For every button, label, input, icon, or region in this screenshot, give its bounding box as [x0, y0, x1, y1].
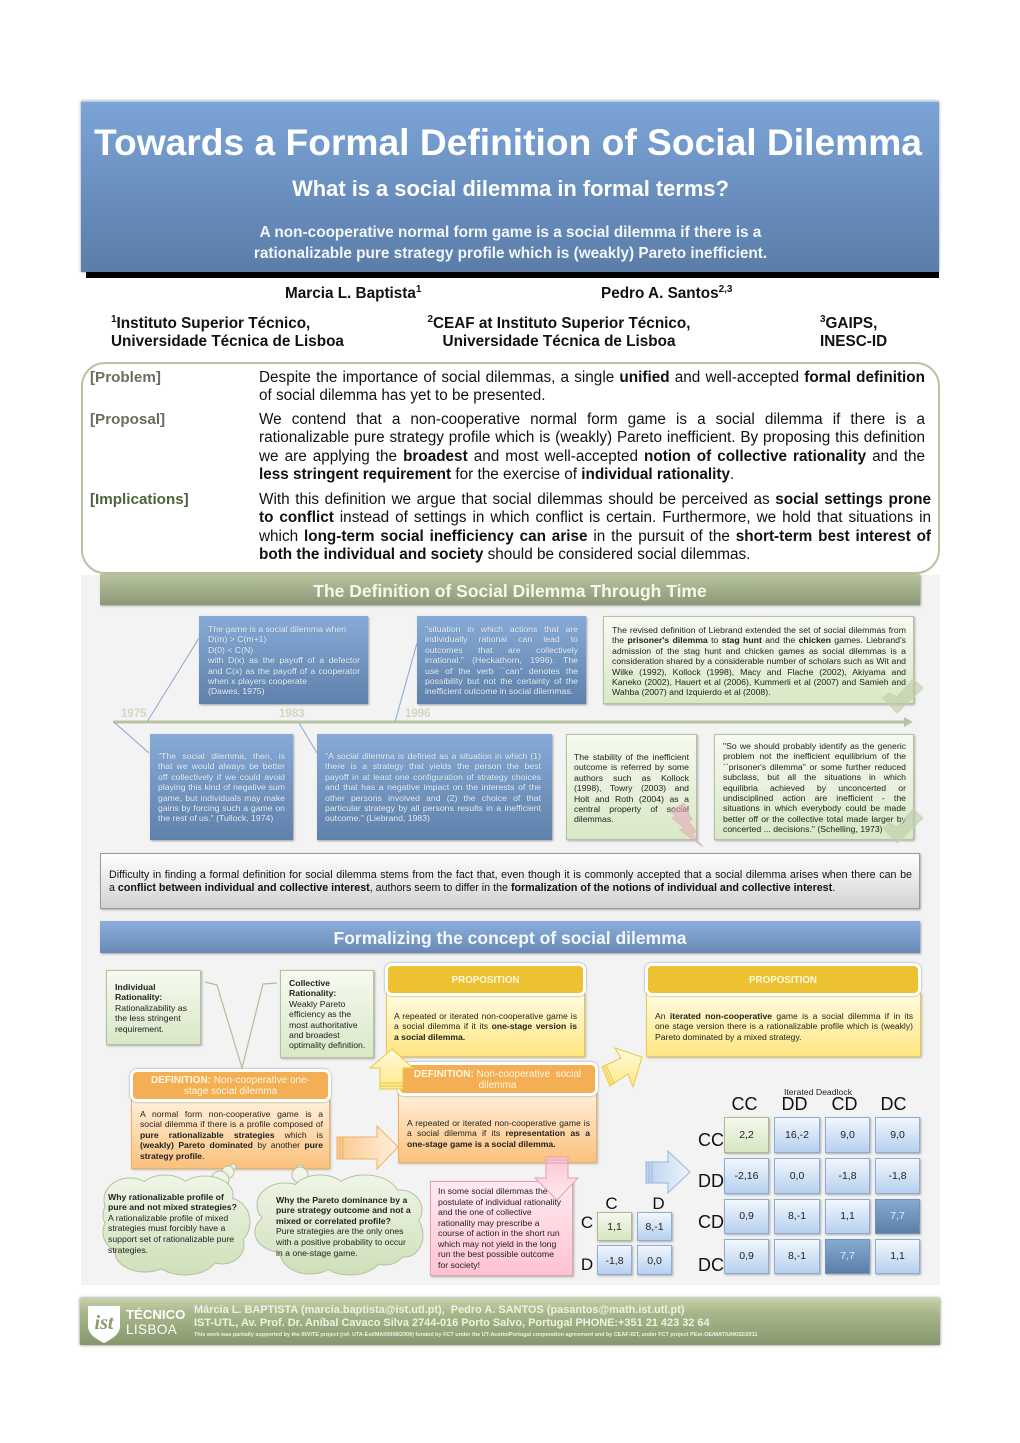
section heading: formalizing: Formalizing the concept of social dilemma	[334, 928, 686, 948]
thought cloud 1: pure and not mixed strategies?	[108, 1202, 237, 1212]
callout: pink note: course of action in the short run	[438, 1228, 560, 1238]
box: individual rationality: the less stringent	[115, 1013, 181, 1023]
box: Schelling 1973: problem not the inefficient equilibrium of the	[723, 751, 906, 761]
year 1983: 1983	[279, 708, 305, 720]
box: Schelling 1973	[714, 734, 914, 840]
cell 7,7 highlighted: 7,7	[840, 1250, 855, 1262]
definition header: DEFINITION: Non-cooperative social	[414, 1069, 581, 1080]
text: implications	[259, 491, 931, 563]
contact details	[194, 1304, 710, 1329]
label: problem: [Problem]	[90, 369, 161, 386]
box: Dawes 1975: when x players cooperate	[208, 676, 307, 686]
section heading: formalizing	[100, 921, 920, 953]
footer bar	[80, 1298, 940, 1345]
box: Schelling 1973: ``prisoner's dilemma" or some further reduced	[723, 762, 906, 772]
proposition header	[385, 963, 586, 996]
contact details: Márcia L. BAPTISTA (marcia.baptista@ist.utl.pt), Pedro A. SANTOS (pasantos@math.ist.utl.pt)	[194, 1304, 684, 1316]
box: Liebrand extensions: the prisoner's dilemma to stag hunt and the chicken games. Liebrand's	[612, 635, 906, 645]
callout: pink note: In some social dilemmas the	[438, 1186, 548, 1196]
cell 9,0	[825, 1117, 870, 1153]
definition body	[398, 1092, 597, 1163]
year 1975: 1975	[121, 708, 147, 720]
connector lines to definition	[205, 982, 277, 1068]
cell 8,-1: 8,-1	[788, 1250, 806, 1262]
cell C,D	[637, 1212, 672, 1241]
box: Liebrand 1983: and that has a negative impact on the interests of the	[325, 782, 541, 792]
box: Schelling 1973: situations in which everybody could be made	[723, 803, 906, 813]
callout: pink note: rationality may prescribe a	[438, 1218, 539, 1228]
text: proposal	[259, 411, 925, 483]
proposition: repeated game	[384, 962, 588, 1059]
text: proposal: we are applying the broadest and most well-accepted notion of collective rationality and the	[259, 448, 925, 465]
section heading: through time: The Definition of Social Dilemma Through Time	[313, 581, 707, 601]
box: collective rationality: and broadest	[289, 1030, 340, 1040]
banner gradient panel	[81, 101, 939, 272]
proposition body: a social dilemma.	[394, 1032, 465, 1042]
row label D: D	[581, 1255, 593, 1274]
text: problem	[259, 369, 925, 404]
cell -1,8	[825, 1158, 870, 1194]
cell 7,7 highlighted: 7,7	[890, 1210, 905, 1222]
proposition body: A repeated or iterated non-cooperative game is	[394, 1011, 577, 1021]
cell -1,8: -1,8	[888, 1170, 907, 1182]
icon: check mark 1	[883, 679, 923, 713]
definition body: (weakly) Pareto dominated by another pure	[140, 1140, 323, 1150]
box: Schelling 1973: equilibria achieved by unconcerted or	[723, 783, 906, 793]
box: Liebrand 1983: there is a strategy that yields the person the best	[325, 761, 541, 771]
thought cloud 1: strategies must forcibly have a	[108, 1223, 226, 1233]
proposition header	[645, 963, 921, 996]
cell 1,1: 1,1	[890, 1250, 905, 1262]
box: Liebrand 1983: particular strategy by all persons results in a inefficient	[325, 803, 541, 813]
proposition body: Pareto dominated by a mixed strategy.	[655, 1032, 802, 1042]
box: Tullock 1974: off collectively if we could avoid	[158, 772, 285, 782]
proposition body: An iterated non-cooperative game is a social dilemma if in its	[655, 1011, 913, 1021]
box: Dawes 1975: The game is a social dilemma when	[208, 624, 346, 634]
iterated deadlock matrix	[698, 1087, 922, 1276]
box: Heckathorn 1996: "situation in which actions that are	[425, 624, 578, 634]
box: Liebrand extensions: Wahba (2007) and Izquierdo et al (2008).	[612, 687, 771, 697]
cell 2,2	[724, 1117, 769, 1153]
row label DC: DC	[698, 1255, 724, 1275]
definition: non-cooperative	[396, 1060, 600, 1165]
thought cloud 1: A rationalizable profile of mixed	[108, 1213, 228, 1223]
proposition: iterated game	[644, 962, 923, 1059]
box: individual rationality: Individual	[115, 982, 156, 992]
matrix caption: Iterated Deadlock	[784, 1087, 852, 1097]
light gray poster background	[81, 575, 940, 1285]
cell C,C	[597, 1212, 632, 1241]
arrow: up to proposition	[370, 1049, 413, 1089]
cell 2,2: 2,2	[739, 1129, 754, 1141]
cell D,D: 0,0	[647, 1255, 662, 1267]
key statement: A non-cooperative normal form game is a social dilemma if there is a	[260, 224, 761, 241]
cell -1,8	[875, 1158, 920, 1194]
abstract panel	[81, 362, 940, 574]
cell 8,-1	[774, 1199, 820, 1234]
proposition body: one stage version there is a rationalizable profile which is (weakly)	[655, 1021, 913, 1031]
box: Dawes 1975: with D(x) as the payoff of a defector	[208, 655, 360, 665]
cell 0,9: 0,9	[739, 1210, 754, 1222]
column label DC: DC	[880, 1094, 906, 1114]
definition header: dilemma	[479, 1080, 516, 1091]
row label CD: CD	[698, 1212, 724, 1232]
box: Schelling 1973: undisciplined action are inefficient - the	[723, 793, 906, 803]
arrow: diagonal to iterated proposition	[602, 1048, 642, 1087]
box: Tullock 1974: "The social dilemma, then, is	[158, 751, 285, 761]
definition body: strategy profile.	[140, 1151, 204, 1161]
cell -2,16	[724, 1158, 769, 1194]
cell -1,8: -1,8	[838, 1170, 857, 1182]
key statement: rationalizable pure strategy profile which is (weakly) Pareto inefficient.	[254, 245, 767, 262]
funding note: This work was partially supported by the INVITE project (ref. UTA-Est/MAI/0008/2009) funded by FCT under the UT-Austin/Portugal cooperation agreement and by CEAF-IST, under FCT project PEst-OE/MAT/UI4032/2011	[194, 1332, 757, 1338]
box: Liebrand extensions: admission of the stag hunt and chicken games as social dilemmas is a	[612, 646, 906, 656]
definition: one-stage	[128, 1068, 332, 1171]
box: stability of inefficient outcome: dilemmas.	[574, 814, 614, 824]
thought cloud 2: mixed or correlated profile?	[276, 1216, 391, 1226]
box: Liebrand extensions: The revised definition of Liebrand extended the set of social dilemmas from	[612, 625, 906, 635]
cell 0,0	[774, 1158, 820, 1194]
box: Heckathorn 1996: individually rational can lead to	[425, 634, 578, 644]
column label D: D	[652, 1194, 665, 1213]
box: Heckathorn 1996: use of the verb ``can'' denotes the	[425, 666, 578, 676]
box: collective rationality: most authoritative	[289, 1020, 358, 1030]
contact details: IST-UTL, Av. Prof. Dr. Aníbal Cavaco Silva 2744-016 Porto Salvo, Portugal PHONE:+351 21 423 32 64	[194, 1317, 710, 1329]
text: implications: which long-term social inefficiency can arise in the pursuit of the short-term best interest of	[259, 528, 931, 545]
box: Liebrand extensions: Kaneko (2002), Hauert et al (2006), Kummerli et al (2007) and Samieh and	[612, 677, 906, 687]
box: Schelling 1973: better off or the collective total made larger by	[723, 814, 906, 824]
text: proposal: less stringent requirement for the exercise of individual rationality.	[259, 466, 734, 483]
subtitle: What is a social dilemma in formal terms?	[292, 176, 729, 201]
box: stability of inefficient outcome: (1998), Towry (2003) and	[574, 783, 689, 793]
box: stability of inefficient outcome	[566, 734, 697, 840]
affiliation 2: Universidade Técnica de Lisboa	[443, 333, 675, 350]
box: Heckathorn 1996	[417, 616, 586, 704]
arrow: right to large matrix	[646, 1151, 690, 1193]
box: Liebrand 1983: "A social dilemma is defined as a situation in which (1)	[325, 751, 541, 761]
box: Liebrand 1983	[317, 734, 552, 840]
year 1996: 1996	[405, 708, 431, 720]
thought cloud 2: in a one-stage game.	[276, 1248, 358, 1258]
definition header: stage social dilemma	[184, 1086, 277, 1097]
box: Tullock 1974: that we would always be better	[158, 761, 285, 771]
box: Schelling 1973: concerted ... decisions." (Schelling, 1973)	[723, 824, 883, 834]
box: Tullock 1974: playing this kind of negative sum	[158, 782, 285, 792]
box: Tullock 1974: the rest of us." (Tullock, 1974)	[158, 813, 273, 823]
box: Dawes 1975: D(0) < C(N)	[208, 645, 253, 655]
row label C: C	[581, 1213, 593, 1232]
box: collective rationality: Rationality:	[289, 988, 336, 998]
box: Dawes 1975: (Dawes, 1975)	[208, 686, 264, 696]
box: Dawes 1975: D(m) > C(m+1)	[208, 634, 266, 644]
text: proposal: We contend that a non-cooperative normal form game is a social dilemma if there is a	[259, 411, 925, 428]
definition header	[397, 1062, 598, 1096]
cell 16,-2	[774, 1117, 820, 1153]
cell 7,7 highlighted	[875, 1199, 920, 1234]
cell D,C	[597, 1245, 632, 1275]
box: Heckathorn 1996: inefficient outcome in social dilemmas.	[425, 686, 573, 696]
box: collective rationality: Weakly Pareto	[289, 999, 345, 1009]
text: problem: of social dilemma has yet to be presented.	[259, 387, 546, 404]
cell 1,1: 1,1	[840, 1210, 855, 1222]
definition body: A normal form non-cooperative game is a	[140, 1109, 323, 1119]
column label CD: CD	[832, 1094, 858, 1114]
cell 0,9: 0,9	[739, 1250, 754, 1262]
affiliation 3: 3GAIPS,	[820, 314, 877, 332]
box: Schelling 1973: "So we should probably identify as the generic	[723, 741, 906, 751]
author: Santos: Pedro A. Santos2,3	[601, 284, 732, 302]
key statement	[254, 224, 767, 262]
small payoff matrix	[581, 1194, 674, 1278]
logo: IST shield	[88, 1306, 120, 1343]
row label CC: CC	[698, 1130, 724, 1150]
box: collective rationality: optimality definition.	[289, 1040, 365, 1050]
box: Liebrand extensions: Wilke (1992), Kollock (1998), Macy and Flache (2002), Akiyama and	[612, 667, 906, 677]
box: Tullock 1974: game, but individuals may make	[158, 793, 285, 803]
box: individual rationality: Rationality:	[115, 992, 162, 1002]
thought cloud 1: support set of rationalizable pure	[108, 1234, 234, 1244]
box: collective rationality	[280, 970, 374, 1058]
thought cloud 2: with a positive probability to occur	[275, 1237, 406, 1247]
callout: pink note: which may not yield in the long	[438, 1238, 556, 1248]
thought cloud 1: strategies.	[108, 1245, 148, 1255]
arrow: right to next definition	[337, 1126, 398, 1169]
definition header: DEFINITION: Non-cooperative one-	[151, 1075, 310, 1086]
cell -2,16: -2,16	[735, 1170, 758, 1182]
logo text: TÉCNICO	[126, 1307, 185, 1322]
thought cloud 2: pure strategy outcome and not a	[276, 1205, 411, 1215]
cell 0,9	[724, 1239, 769, 1274]
label: proposal: [Proposal]	[90, 411, 165, 428]
box: Dawes 1975: and C(x) as the payoff of a cooperator	[208, 666, 360, 676]
thought cloud 2	[255, 1165, 423, 1275]
definition body: one-stage game is a social dilemma.	[407, 1139, 556, 1149]
icon: lightning bolt	[670, 803, 703, 847]
affiliation 3	[820, 314, 887, 350]
cell 9,0: 9,0	[890, 1129, 905, 1141]
title banner	[79, 99, 941, 278]
box: individual rationality: requirement.	[115, 1024, 164, 1034]
proposition body	[646, 993, 921, 1057]
definition body: A repeated or iterated non-cooperative game is	[407, 1118, 590, 1128]
definition header	[130, 1069, 331, 1102]
box: stability of inefficient outcome: central property of social	[574, 804, 689, 814]
proposition body	[386, 993, 585, 1057]
box: Heckathorn 1996: possibility but not the certainty of the	[425, 676, 578, 686]
affiliation 2: 2CEAF at Instituto Superior Técnico,	[427, 314, 691, 332]
callout: difficulty: Difficulty in finding a formal definition for social dilemma stems from the fact that, even though it is commonly accepted that a social dilemma arises when there can be	[109, 869, 912, 881]
box: collective rationality: efficiency as the	[289, 1009, 351, 1019]
proposition body: a social dilemma if it its one-stage version is	[394, 1021, 577, 1031]
callout: difficulty	[100, 853, 920, 909]
callout: pink note: for society!	[438, 1260, 480, 1270]
box: stability of inefficient outcome: The stability of the inefficient	[574, 752, 689, 762]
cell C,D: 8,-1	[645, 1221, 664, 1233]
column label C: C	[605, 1194, 618, 1213]
definition body: pure rationalizable strategies which is	[140, 1130, 323, 1140]
affiliation 2	[427, 314, 691, 350]
cell 16,-2: 16,-2	[785, 1129, 809, 1141]
callout: pink note	[430, 1181, 573, 1276]
cell C,C: 1,1	[607, 1221, 622, 1233]
box: Dawes 1975	[199, 616, 368, 704]
box: Tullock 1974: gains by forcing such a game on	[158, 803, 285, 813]
affiliation 3: INESC-ID	[820, 333, 887, 350]
box: stability of inefficient outcome: Holt and Roth (2004) as a	[574, 794, 689, 804]
box: collective rationality: Collective	[289, 978, 330, 988]
cell 9,0: 9,0	[840, 1129, 855, 1141]
cell 0,9	[724, 1199, 769, 1234]
logo: IST shield: ist	[95, 1312, 115, 1334]
text: proposal: rationalizable pure strategy profile which is (weakly) Pareto inefficient. By proposing this definition	[259, 429, 925, 446]
affiliation 1	[111, 314, 344, 350]
callout: difficulty: a conflict between individual and collective interest, authors seem to differ in the formalization of the notions of individual and collective interest.	[109, 882, 835, 894]
banner black base bar	[86, 266, 939, 278]
box: stability of inefficient outcome: outcome is referred by some	[574, 762, 689, 772]
logo text	[126, 1307, 185, 1337]
box: Liebrand 1983: payoff in at least one configuration of strategy choices	[325, 772, 541, 782]
cell 1,1	[825, 1199, 870, 1234]
thought cloud 2: Why the Pareto dominance by a	[276, 1195, 407, 1205]
callout: pink note: run the best possible outcome	[438, 1249, 554, 1259]
box: Liebrand 1983: outcome." (Liebrand, 1983)	[325, 813, 430, 823]
label: implications: [Implications]	[90, 491, 189, 508]
box: stability of inefficient outcome: authors such as Kollock	[574, 773, 689, 783]
icon: check mark 2	[883, 809, 923, 843]
callout: pink note: postulate of individual rationality	[438, 1196, 561, 1206]
text: implications: both the individual and society should be considered social dilemmas.	[259, 546, 750, 563]
author: Baptista: Marcia L. Baptista1	[285, 284, 421, 302]
affiliation 1: Universidade Técnica de Lisboa	[111, 333, 344, 350]
cell D,D	[637, 1245, 672, 1275]
callout: pink note: and the one of collective	[438, 1207, 532, 1217]
box: Tullock 1974	[150, 734, 293, 840]
title: Towards a Formal Definition of Social Dilemma	[94, 121, 922, 163]
box: Liebrand extensions: consideration shared by a considerable number of scholars such as Wit and	[612, 656, 906, 666]
thought cloud 1	[103, 1164, 250, 1275]
logo text: LISBOA	[126, 1322, 177, 1337]
affiliation 1: 1Instituto Superior Técnico,	[111, 314, 310, 332]
cell 9,0	[875, 1117, 920, 1153]
text: problem: Despite the importance of social dilemmas, a single unified and well-accepted formal definition	[259, 369, 925, 386]
box: individual rationality	[106, 970, 201, 1045]
column label DD: DD	[782, 1094, 808, 1114]
box: individual rationality: Rationalizability as	[115, 1003, 187, 1013]
thought cloud 2: Pure strategies are the only ones	[276, 1226, 404, 1236]
thought cloud 1: Why rationalizable profile of	[108, 1192, 224, 1202]
box: Schelling 1973: subclass, but all the situations in which	[723, 772, 906, 782]
text: implications: to conflict instead of settings in which conflict is certain. Furthermore, we hold that situations in	[259, 509, 931, 526]
box: Liebrand 1983: other persons involved and (2) the choice of that	[325, 793, 541, 803]
text: implications: With this definition we argue that social dilemmas should be perceived as social settings prone	[259, 491, 931, 508]
definition body: a social dilemma if its representation as a	[407, 1128, 590, 1138]
cell 7,7 highlighted	[825, 1239, 870, 1274]
proposition header: PROPOSITION	[451, 975, 520, 986]
definition body: social dilemma if there is a profile composed of	[140, 1119, 323, 1129]
section heading: through time	[100, 574, 920, 605]
arrow: down to note	[535, 1157, 578, 1200]
timeline arrow	[113, 638, 913, 753]
row label DD: DD	[698, 1171, 724, 1191]
cell D,C: -1,8	[605, 1255, 624, 1267]
proposition header: PROPOSITION	[749, 975, 817, 986]
column label CC: CC	[732, 1094, 758, 1114]
box: Heckathorn 1996: outcomes that are collectively	[425, 645, 578, 655]
cell 8,-1	[774, 1239, 820, 1274]
definition body	[131, 1099, 330, 1169]
cell 0,0: 0,0	[790, 1170, 804, 1182]
box: Liebrand extensions	[603, 616, 914, 704]
cell 8,-1: 8,-1	[788, 1210, 806, 1222]
box: Heckathorn 1996: irrational." (Heckathorn, 1996). The	[425, 655, 578, 665]
cell 1,1	[875, 1239, 920, 1274]
